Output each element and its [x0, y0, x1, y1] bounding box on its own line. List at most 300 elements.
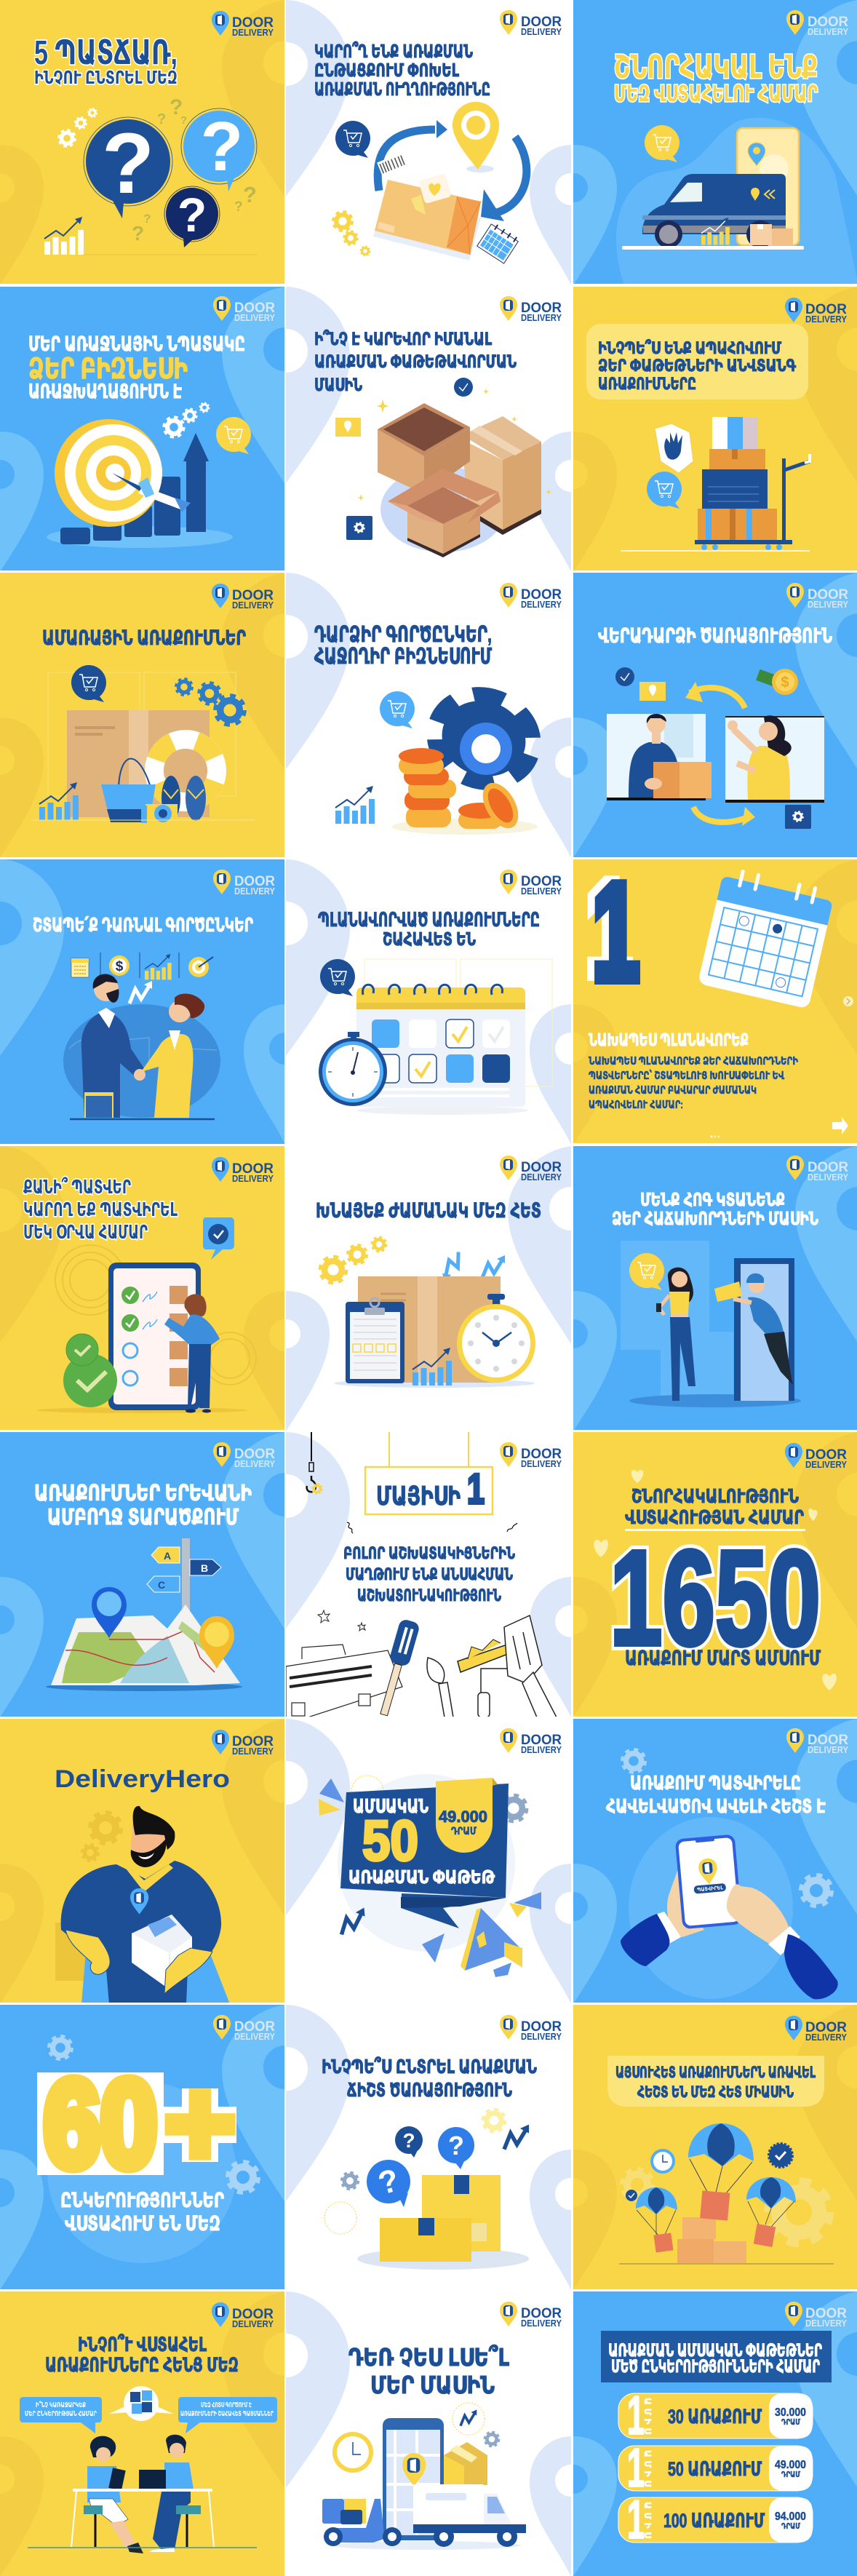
small question marks: ? — [132, 222, 144, 245]
price tag — [436, 1778, 498, 1853]
next arrow — [832, 1117, 848, 1134]
heading — [614, 49, 818, 106]
heading: ՄԵՆՔ ՀՈԳ ԿՏԱՆԵՆՔ — [640, 1190, 785, 1210]
row: 100 deliveries: 100 ԱՌԱՔՈՒՄ — [663, 2510, 765, 2532]
cart bubble — [647, 472, 682, 509]
heading: ՆԱԽԱՊԵՍ ՊԼԱՆԱՎՈՐԵՔ — [589, 1030, 749, 1049]
row: 100 deliveries — [618, 2489, 813, 2550]
logo: DOOR — [805, 2306, 847, 2321]
callout panel — [607, 2056, 824, 2107]
table and stools — [71, 2489, 214, 2547]
body text: ԱՇԽԱՏՈՒՆԱԿՈՒԹՅՈՒՆ — [357, 1586, 501, 1605]
logo: DOOR — [232, 15, 274, 31]
logo: DOOR — [808, 15, 848, 30]
squiggles — [347, 1522, 517, 1533]
heading: ՄԵԿ ՕՐՎԱ ՀԱՄԱՐ — [23, 1221, 148, 1243]
small question marks: ? — [234, 199, 243, 215]
stopwatch — [319, 1032, 387, 1106]
callout panel: ՁԵՐ ՓԱԹԵԹՆԵՐԻ ԱՆՎՏԱՆԳ — [598, 357, 797, 375]
location pin — [453, 102, 499, 172]
flip flops — [162, 776, 206, 821]
crane hook — [307, 1432, 322, 1494]
question bubbles — [367, 2126, 474, 2207]
woman — [164, 1294, 220, 1413]
man with laptop — [139, 2435, 194, 2552]
body copy: ԱՌԱՔՄԱՆ ՀԱՄԱՐ ԲԱՎԱՐԱՐ ԺԱՄԱՆԱԿ — [589, 1084, 757, 1097]
logo — [500, 10, 562, 37]
logo: DOOR — [232, 1734, 274, 1749]
target — [55, 419, 162, 527]
row: 30 deliveries: 30 ԱՌԱՔՈՒՄ — [668, 2406, 762, 2428]
gears — [341, 2110, 505, 2190]
ground shadow — [47, 526, 233, 548]
row: 100 deliveries: ԴՐԱՄ — [781, 2522, 800, 2531]
green check marks — [63, 1334, 117, 1407]
logo: DOOR — [234, 874, 275, 889]
ground — [356, 1106, 528, 1115]
cart bubble — [380, 691, 415, 728]
left parachute — [636, 2187, 677, 2253]
phone: ՊԱՏՎԻՐԵԼ — [697, 1885, 723, 1893]
gears — [49, 2036, 258, 2193]
dashed circle — [324, 2202, 356, 2234]
heading — [314, 329, 517, 395]
panel: planned deliveries — [286, 859, 571, 1144]
logo: DELIVERY — [805, 1459, 847, 1470]
logo — [212, 11, 274, 38]
scooter — [322, 2499, 402, 2546]
question bubble: large: ? — [102, 116, 154, 212]
banner text: ԱՄՍԱԿԱՆ — [353, 1795, 428, 1817]
row: 50 deliveries: 50 ԱՌԱՔՈՒՄ — [668, 2458, 762, 2480]
logo: DELIVERY — [232, 27, 274, 38]
logo — [213, 870, 275, 897]
speech bubble left — [20, 2397, 102, 2433]
row: 50 deliveries — [618, 2437, 813, 2498]
phone with map — [737, 128, 799, 245]
carousel chevron — [843, 996, 853, 1006]
background blob — [616, 118, 857, 285]
door — [734, 1258, 794, 1401]
logo: DELIVERY — [232, 2318, 274, 2329]
zigzag arrow — [129, 981, 152, 1003]
callout panel — [586, 324, 808, 399]
numeral one — [585, 851, 639, 1009]
blob — [629, 1817, 793, 1999]
panel: May 1st — [286, 1432, 571, 1717]
logo: DOOR — [808, 1733, 848, 1748]
ground — [622, 246, 804, 250]
question bubble: dark: ? — [178, 188, 207, 242]
clock — [650, 2149, 675, 2174]
toolbox — [286, 1645, 402, 1717]
logo: DELIVERY — [808, 599, 848, 610]
panel: our goal — [0, 287, 284, 571]
hero head — [131, 1806, 175, 1868]
logo — [500, 1728, 562, 1755]
signpost: B — [201, 1562, 208, 1574]
speech bubble left: ՄԵՐ ԸՆԿԵՐՈՒԹՅԱՆ ՀԱՄԱՐ — [25, 2410, 97, 2418]
gear tile — [785, 805, 811, 829]
panel: safe delivery — [573, 287, 857, 571]
barcode tag — [377, 152, 408, 176]
caption — [60, 2189, 224, 2235]
body text — [343, 1544, 515, 1605]
left hand and sleeve — [621, 1861, 704, 1966]
panel: monthly 50 package — [286, 1719, 571, 2003]
numeral one: 1 — [585, 851, 632, 1006]
logo: DOOR — [521, 1733, 562, 1748]
row: 30 deliveries: 30.000 — [775, 2406, 806, 2419]
stop hand badge — [655, 424, 693, 473]
blue pin — [92, 1587, 127, 1638]
logo: DOOR — [234, 2019, 275, 2035]
gears — [622, 2169, 829, 2243]
body text: ԲՈԼՈՐ ԱՇԽԱՏԱԿԻՑՆԵՐԻՆ — [343, 1544, 515, 1562]
window: customer — [725, 715, 824, 803]
panel: how to choose delivery — [286, 2005, 571, 2289]
carousel dots — [710, 1135, 720, 1138]
body copy: ՊԱՏՎԵՐՆԵՐԸ՝ ՇՏԱՊԵԼՈՒՑ ԽՈՒՍԱՓԵԼՈՒ ԵՎ — [589, 1069, 784, 1082]
signpost: A — [164, 1550, 171, 1562]
logo: DELIVERY — [521, 1458, 562, 1469]
zigzag arrow — [504, 2125, 529, 2150]
question bubbles: ? — [448, 2131, 464, 2160]
panel: packaging — [286, 287, 571, 571]
gears — [320, 1237, 386, 1283]
panel: plan in advance — [573, 851, 857, 1143]
logo: DELIVERY — [232, 1746, 274, 1757]
growth chart icon — [44, 217, 84, 255]
arrows around package — [378, 120, 527, 221]
logo — [500, 583, 562, 610]
zigzag arrow — [340, 1908, 366, 1934]
price tag: 49.000 — [439, 1808, 487, 1826]
ribbon banner — [340, 1784, 509, 1928]
row: 30 deliveries: ԱՄԻՍ — [642, 2398, 653, 2434]
logo — [500, 870, 562, 897]
dashed trend circle — [453, 2403, 485, 2435]
growth chart — [412, 1348, 452, 1386]
dart — [112, 473, 191, 512]
calendar — [477, 222, 519, 263]
decor gears and building — [55, 1813, 121, 1981]
icon row — [71, 953, 213, 979]
logo — [213, 2015, 275, 2042]
coin stack — [399, 748, 456, 827]
logo: DELIVERY — [808, 26, 848, 37]
heading: ՀԱՋՈՂԻՐ ԲԻԶՆԵՍՈՒՄ — [314, 645, 492, 669]
row: 100 deliveries: ԱՄԻՍ — [642, 2502, 653, 2538]
phone — [383, 2418, 444, 2540]
confetti triangles — [319, 1778, 541, 1963]
numeral one: 1 — [592, 855, 639, 1009]
body copy — [589, 1055, 798, 1111]
signpost — [147, 1538, 221, 1611]
blob — [47, 2081, 236, 2263]
speech bubble right: ՄԵԶ ՀՈՏՍ ԳՈՐԾՈՒՄ Է — [201, 2401, 252, 2409]
panel: 60+ companies — [0, 2005, 284, 2289]
heading — [314, 623, 492, 669]
growth chart — [335, 786, 375, 824]
logo: DELIVERY — [521, 599, 562, 610]
panel: we care for your customers — [573, 1146, 857, 1430]
row: 50 deliveries: 1 — [627, 2437, 645, 2498]
heading: ԻՆՉՈՒ ԸՆՏՐԵԼ ՄԵԶ — [34, 68, 178, 88]
logo: DOOR — [521, 2306, 562, 2321]
chest pin — [130, 1888, 148, 1915]
calendar — [698, 867, 835, 1009]
heading: ԴԵՌ ՉԵՍ ԼՍԵ՞Լ — [348, 2344, 509, 2371]
question bubbles: ? — [375, 2162, 402, 2202]
small question marks: ? — [243, 182, 257, 207]
hanging sign: 1 — [467, 1466, 485, 1513]
row: 30 deliveries: ԴՐԱՄ — [781, 2418, 800, 2427]
parcel — [444, 2442, 487, 2485]
body copy: ԱՊԱՀՈՎԵԼՈՒ ՀԱՄԱՐ: — [589, 1099, 683, 1111]
logo: DELIVERY — [234, 1458, 275, 1469]
ground — [332, 2541, 521, 2550]
logo: DOOR — [521, 2019, 562, 2035]
cart bubble — [629, 1253, 664, 1290]
question bubble: dark — [164, 186, 220, 247]
logo: DELIVERY — [232, 600, 274, 611]
small chart — [701, 218, 730, 245]
panel: delivery hero — [0, 1719, 284, 2003]
heading — [606, 1772, 826, 1817]
heading — [45, 2334, 239, 2376]
big number: + — [164, 2054, 236, 2193]
parcels — [750, 224, 793, 245]
back box — [422, 2175, 501, 2251]
heading: ՃԻՇՏ ԾԱՌԱՅՈՒԹՅՈՒՆ — [347, 2079, 512, 2101]
shadow — [629, 1394, 801, 1407]
row: 100 deliveries: 94.000 — [775, 2511, 806, 2523]
logo: DOOR — [521, 874, 562, 889]
logo — [212, 2302, 274, 2329]
heading — [348, 2344, 509, 2398]
hero body — [61, 1861, 221, 2004]
logo: DELIVERY — [234, 312, 275, 323]
small question marks: ? — [143, 212, 151, 226]
panel: thank you for trusting us — [573, 0, 857, 284]
logo: DELIVERY — [232, 1173, 274, 1184]
gears — [333, 212, 370, 256]
logo — [500, 296, 562, 323]
open dark box — [378, 403, 470, 494]
panel: summer deliveries — [0, 573, 284, 857]
speech bubble left: Ի՞ՆՉ ԿԱՌԱՋԱՐԿԵՔ — [36, 2401, 86, 2409]
heading: ՇԱՀԱՎԵՏ ԵՆ — [383, 929, 476, 950]
screwdriver — [374, 1618, 420, 1717]
gears — [622, 1749, 832, 1906]
logo: DELIVERY — [805, 2318, 847, 2329]
calendar — [356, 959, 552, 1107]
pale circle — [380, 466, 506, 552]
panel: become partner — [286, 573, 571, 857]
row: 100 deliveries: 1 — [627, 2489, 645, 2550]
banner text: ԱՌԱՔՄԱՆ ՓԱԹԵԹ — [348, 1867, 495, 1888]
icon row: $ — [116, 959, 124, 974]
stars — [318, 1610, 365, 1631]
logo: DELIVERY — [234, 2031, 275, 2042]
row: 50 deliveries: 49.000 — [775, 2459, 806, 2471]
logo: DELIVERY — [521, 886, 562, 897]
logo: DOOR — [521, 15, 562, 30]
logo: DOOR — [232, 588, 274, 603]
verified badges — [626, 2144, 792, 2201]
beach bag — [101, 759, 156, 822]
gears — [176, 679, 244, 725]
logo — [500, 2015, 562, 2042]
heading panel — [601, 2331, 832, 2382]
price tag: ԴՐԱՄ — [451, 1825, 477, 1837]
logo — [500, 2302, 562, 2329]
ground — [357, 2248, 529, 2270]
panel: haven't you heard about us — [286, 2291, 571, 2576]
small question marks: ? — [157, 111, 166, 127]
heading: ԱՌԱՔՈՒՄ ՊԱՏՎԻՐԵԼԸ — [630, 1772, 801, 1794]
heading — [23, 1176, 178, 1243]
ground — [392, 819, 538, 835]
panel: deliveries across Yerevan — [0, 1432, 284, 1717]
caption: ՎՍՏԱՀՈՒՄ ԵՆ ՄԵԶ — [65, 2212, 220, 2235]
cart bubble — [645, 125, 679, 162]
small question marks: ? — [180, 114, 187, 127]
heading: 5 ՊԱՏՃԱՌ, — [34, 33, 178, 71]
cart bubble — [71, 665, 106, 702]
clock — [457, 1294, 535, 1383]
heading: ԿԱՐՈ՞Ղ ԵՆՔ ԱՌԱՔՄԱՆ — [314, 41, 473, 62]
scraper — [504, 1615, 557, 1717]
logo: DELIVERY — [521, 2318, 562, 2329]
courier — [714, 1273, 793, 1385]
logo — [785, 1443, 847, 1470]
panel: from now on deliveries are easier — [573, 2005, 857, 2289]
logo: DOOR — [232, 2307, 274, 2322]
panel: 5 reasons to choose us — [0, 0, 284, 284]
right parachute — [746, 2177, 796, 2247]
panel: hurry to become partner — [0, 859, 284, 1144]
callout panel: ԱՌԱՔՈՒՄՆԵՐԸ — [598, 375, 696, 393]
logo — [212, 1157, 274, 1184]
caption: ԸՆԿԵՐՈՒԹՅՈՒՆՆԵՐ — [60, 2189, 224, 2211]
logo: DELIVERY — [521, 312, 562, 323]
sparkles — [357, 389, 551, 501]
callout panel: ՀԵՇՏ ԵՆ ՄԵԶ ՀԵՏ ՄԻԱՍԻՆ — [637, 2084, 794, 2101]
panel: thank you 1650 — [573, 1432, 857, 1717]
logo — [786, 1728, 848, 1755]
window: courier — [607, 714, 711, 800]
heading: ԻՆՉՈ՞Ւ ՎՍՏԱՀԵԼ — [78, 2334, 207, 2356]
logo — [786, 583, 848, 610]
package box — [373, 180, 481, 261]
heading: ԴԱՐՁԻՐ ԳՈՐԾԸՆԿԵՐ, — [314, 623, 492, 647]
logo — [500, 1156, 562, 1182]
logo: DELIVERY — [805, 2032, 847, 2043]
heading: ԱՌԱՋԽԱՂԱՑՈՒՄՆ Է — [28, 381, 182, 402]
logo — [213, 1442, 275, 1469]
decorative rings — [55, 1245, 256, 1385]
logo — [500, 1442, 562, 1469]
logo — [212, 584, 274, 611]
logo: DELIVERY — [521, 1172, 562, 1182]
heading: Ի՞ՆՉ Է ԿԱՐԵՎՈՐ ԻՄԱՆԱԼ — [314, 329, 492, 349]
logo: DELIVERY — [521, 2031, 562, 2042]
logo: DOOR — [232, 1161, 274, 1177]
row: 30 deliveries: 1 — [627, 2385, 645, 2446]
location tile — [639, 682, 666, 701]
panel: how many orders — [0, 1146, 284, 1430]
hero cape — [81, 1937, 230, 2004]
panel: change delivery direction — [286, 0, 571, 284]
coin and banknote — [756, 669, 798, 695]
paint brush — [427, 1658, 453, 1717]
woman with tablet — [87, 2436, 143, 2553]
growth chart — [39, 782, 79, 820]
logo: DOOR — [805, 2020, 847, 2035]
logo — [785, 2016, 847, 2043]
pale circle — [338, 1774, 515, 1952]
tall box — [462, 416, 541, 535]
heading: ԱՄԲՈՂՋ ՏԱՐԱԾՔՈՒՄ — [47, 1506, 239, 1530]
room furniture — [621, 1241, 733, 1397]
heading — [34, 33, 178, 88]
heading: ՎՍՏԱՀՈՒԹՅԱՆ ՀԱՄԱՐ — [625, 1506, 804, 1528]
check badge — [615, 667, 634, 686]
logo — [785, 298, 847, 325]
logo: DELIVERY — [805, 314, 847, 325]
big gear — [423, 682, 544, 795]
open front box — [388, 469, 501, 557]
heading — [612, 1190, 818, 1229]
heading: ԱՌԱՔՄԱՆ ՈՒՂՂՈՒԹՅՈՒՆԸ — [314, 79, 490, 100]
heading — [34, 1482, 252, 1530]
logo: DOOR — [805, 302, 847, 317]
parcel stack and trolley — [695, 417, 810, 550]
body copy: ՆԱԽԱՊԵՍ ՊԼԱՆԱՎՈՐԵՔ ՁԵՐ ՀԱՃԱԽՈՐԴՆԵՐԻ — [589, 1055, 798, 1068]
truck — [413, 2484, 526, 2547]
check badge — [454, 378, 473, 397]
callout panel: ԻՆՉՊԵ՞Ս ԵՆՔ ԱՊԱՀՈՎՈՒՄ — [598, 339, 782, 357]
heading — [318, 909, 540, 950]
logo: DOOR — [234, 1447, 275, 1462]
logo: DOOR — [521, 1160, 562, 1175]
exchange arrows — [685, 682, 755, 826]
logo: DOOR — [521, 1447, 562, 1462]
logo — [786, 1156, 848, 1182]
phone — [675, 1834, 742, 1929]
row: 30 deliveries — [618, 2385, 813, 2446]
row: 50 deliveries: ԴՐԱՄ — [781, 2470, 800, 2479]
ground — [334, 1379, 535, 1388]
dashed circle and gray gear — [351, 1776, 527, 1821]
heading: ԸՆԹԱՑՔՈՒՄ ՓՈԽԵԼ — [314, 60, 459, 81]
verified bubble — [203, 1217, 234, 1260]
logo: DELIVERY — [234, 886, 275, 897]
puzzle globe — [63, 1004, 220, 1118]
heading: ԱՌԱՔՈՒՄՆԵՐ ԵՐԵՎԱՆԻ — [34, 1482, 252, 1506]
logo — [212, 1730, 274, 1757]
gears — [164, 402, 210, 437]
panel: monthly packages for large companies — [573, 2291, 857, 2576]
phone checklist — [108, 1263, 201, 1410]
question bubbles: ? — [402, 2129, 415, 2152]
signpost: C — [158, 1579, 165, 1591]
logo: DELIVERY — [808, 1172, 848, 1182]
fallen coins — [458, 777, 525, 834]
hanging sign: ՄԱՅԻՍԻ — [376, 1481, 461, 1511]
